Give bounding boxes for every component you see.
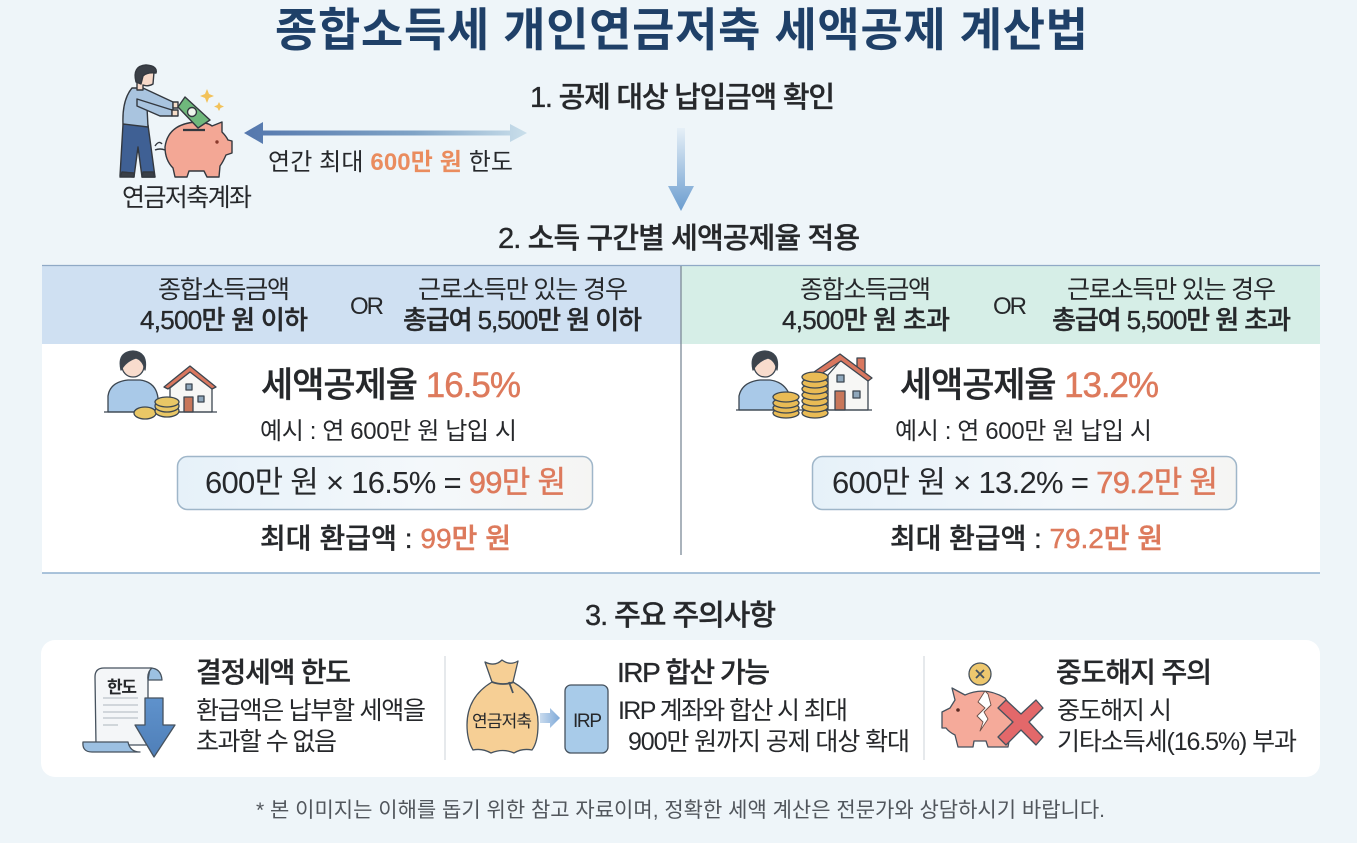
step 3 heading: 3. 주요 주의사항 bbox=[585, 600, 776, 632]
caution 2 text bbox=[617, 657, 910, 756]
icon: limit document with down arrow: 한도 bbox=[107, 678, 137, 697]
icon: person with coins and large house bbox=[736, 351, 872, 418]
right formula box: 600만 원 × 13.2% = 79.2만 원 bbox=[832, 465, 1218, 500]
left header text: 종합소득금액 bbox=[158, 276, 290, 304]
right formula box bbox=[812, 456, 1236, 510]
right header text: 4,500만 원 초과 bbox=[782, 305, 950, 335]
right rate: 세액공제율 13.2% bbox=[900, 366, 1159, 405]
caution 1 text bbox=[196, 657, 426, 756]
left rate: 세액공제율 16.5% bbox=[261, 366, 521, 405]
left header text: 4,500만 원 이하 bbox=[140, 305, 308, 335]
caution 3 text bbox=[1056, 657, 1297, 756]
caution 3 text: 중도해지 시 bbox=[1057, 697, 1172, 725]
left header text bbox=[140, 276, 642, 335]
right header text: 근로소득만 있는 경우 bbox=[1067, 276, 1276, 304]
right header text: OR bbox=[993, 293, 1027, 320]
left header text: 총급여 5,500만 원 이하 bbox=[403, 305, 642, 335]
caution 2 text: IRP 합산 가능 bbox=[617, 657, 770, 688]
step 2 heading: 2. 소득 구간별 세액공제율 적용 bbox=[498, 222, 860, 255]
left header background bbox=[42, 266, 681, 344]
step 1 heading: 1. 공제 대상 납입금액 확인 bbox=[530, 81, 835, 114]
caution 3 text: 중도해지 주의 bbox=[1056, 657, 1212, 688]
caution 1 text: 초과할 수 없음 bbox=[196, 728, 337, 756]
caution 2 text: 900만 원까지 공제 대상 확대 bbox=[628, 728, 910, 756]
caution 2 text: IRP 계좌와 합산 시 최대 bbox=[618, 697, 848, 725]
arrow: two-way annual limit bbox=[244, 122, 527, 144]
left header text: OR bbox=[350, 293, 384, 320]
caution 1 text: 결정세액 한도 bbox=[196, 657, 351, 688]
left header text: 근로소득만 있는 경우 bbox=[418, 276, 628, 304]
left formula box: 600만 원 × 16.5% = 99만 원 bbox=[205, 465, 566, 500]
right header background bbox=[681, 266, 1320, 344]
caution 1 text: 환급액은 납부할 세액을 bbox=[196, 697, 426, 725]
icon: person with coins and small house bbox=[104, 351, 217, 419]
right max refund: 최대 환급액 : 79.2만 원 bbox=[890, 523, 1163, 554]
icon: pension savings bag to IRP: 연금저축 bbox=[472, 712, 532, 731]
left max refund: 최대 환급액 : 99만 원 bbox=[260, 523, 511, 554]
panel: income bracket table bbox=[42, 266, 1320, 573]
panel: key cautions bbox=[41, 640, 1320, 777]
icon: person putting money in piggy bank bbox=[120, 65, 232, 177]
icon: limit document with down arrow bbox=[83, 668, 175, 757]
caution 3 text: 기타소득세(16.5%) 부과 bbox=[1057, 728, 1297, 756]
label: pension account: 연금저축계좌 bbox=[122, 184, 252, 212]
left example: 예시 : 연 600만 원 납입 시 bbox=[260, 418, 517, 445]
icon: pension savings bag to IRP bbox=[467, 660, 608, 753]
annual limit text: 연간 최대 600만 원 한도 bbox=[268, 149, 513, 176]
table body bbox=[42, 344, 1320, 573]
right header text: 종합소득금액 bbox=[800, 276, 931, 304]
icon: pension savings bag to IRP: IRP bbox=[573, 711, 602, 732]
footnote: * 본 이미지는 이해를 돕기 위한 참고 자료이며, 정확한 세액 계산은 전문가와 상담하시기 바랍니다. bbox=[256, 799, 1105, 822]
left formula box bbox=[178, 456, 592, 510]
icon: broken piggy bank with X bbox=[942, 663, 1043, 747]
right example: 예시 : 연 600만 원 납입 시 bbox=[895, 418, 1152, 445]
title: 종합소득세 개인연금저축 세액공제 계산법 bbox=[275, 4, 1088, 56]
right header text bbox=[782, 276, 1291, 335]
right header text: 총급여 5,500만 원 초과 bbox=[1052, 305, 1291, 335]
arrow: down to step 2 bbox=[668, 128, 694, 211]
